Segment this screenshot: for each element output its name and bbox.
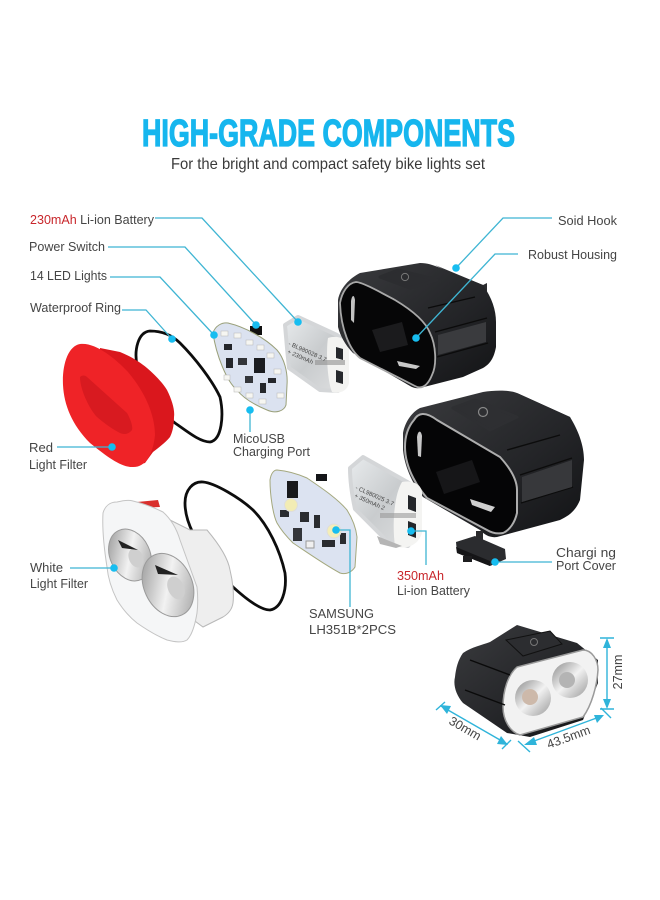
dimension: 27mm bbox=[600, 638, 625, 709]
callout: Red Light Filter: Light Filter bbox=[29, 458, 87, 472]
callout: SAMSUNG LH351B: SAMSUNG bbox=[309, 607, 374, 621]
callout: Red Light Filter bbox=[29, 441, 116, 472]
robust housing, white set bbox=[403, 391, 584, 537]
callout: Robust Housing bbox=[412, 248, 617, 342]
robust housing, red set bbox=[338, 263, 496, 388]
callout: White Light Filter: Light Filter bbox=[30, 577, 88, 591]
callout: 350mAh Li-ion Battery: Li-ion Battery bbox=[397, 584, 471, 598]
callout: Waterproof Ring bbox=[30, 301, 176, 343]
battery, 230mAh bbox=[285, 317, 349, 393]
callout: 350mAh Li-ion Battery: 350mAh bbox=[397, 569, 444, 583]
red light filter bbox=[63, 344, 174, 467]
waterproof ring, red set bbox=[136, 331, 222, 442]
callout: 230mAh Li-ion Battery bbox=[30, 213, 302, 326]
callout: 350mAh Li-ion Battery bbox=[397, 527, 471, 598]
callout: SAMSUNG LH351B bbox=[309, 526, 396, 637]
callout: 230mAh Li-ion Battery: 230mAh Li-ion Battery bbox=[30, 213, 155, 227]
battery, 350mAh: + 350mAh 2 bbox=[353, 493, 386, 512]
dimension: 43.5mm bbox=[518, 708, 611, 752]
callout: White Light Filter bbox=[30, 561, 118, 591]
callout: Power Switch bbox=[29, 240, 260, 329]
battery, 350mAh: - CL980025 3.7 bbox=[354, 485, 395, 508]
circuit board, white set bbox=[270, 470, 357, 574]
callout: Charging Port Cover: Chargi ng bbox=[556, 546, 616, 560]
callout: Charging Port Cover bbox=[491, 546, 616, 573]
circuit board, red set bbox=[213, 323, 287, 412]
charging port cover bbox=[456, 531, 506, 566]
battery, 350mAh bbox=[350, 457, 422, 548]
dimension: 27mm: 27mm bbox=[611, 655, 625, 689]
callout: MicoUSB Charging Port: MicoUSB bbox=[233, 432, 285, 446]
small assembled light with dimensions bbox=[454, 625, 598, 737]
title: HIGH-GRADE COMPONENTS bbox=[142, 113, 515, 155]
dimension: 30mm: 30mm bbox=[446, 714, 484, 743]
waterproof ring, white set bbox=[185, 482, 285, 610]
callout: Soid Hook bbox=[452, 214, 618, 272]
dimension: 30mm bbox=[436, 702, 511, 749]
white light filter bbox=[100, 500, 233, 642]
dimension: 43.5mm: 43.5mm bbox=[545, 723, 592, 752]
battery, 230mAh: + 230mAh bbox=[286, 349, 314, 366]
callout: Soid Hook: Soid Hook bbox=[558, 214, 618, 228]
subtitle: For the bright and compact safety bike lights set bbox=[171, 156, 486, 173]
callout: Waterproof Ring: Waterproof Ring bbox=[30, 301, 121, 315]
battery, 230mAh: - BL980028 3.7 bbox=[287, 341, 328, 364]
callout: White Light Filter: White bbox=[30, 561, 63, 575]
callout: Robust Housing: Robust Housing bbox=[528, 248, 617, 262]
callout: SAMSUNG LH351B: LH351B*2PCS bbox=[309, 623, 396, 637]
callout: 14 LED Lights bbox=[30, 269, 218, 339]
callout: Power Switch: Power Switch bbox=[29, 240, 105, 254]
callout: MicoUSB Charging Port bbox=[233, 406, 311, 459]
callout: Charging Port Cover: Port Cover bbox=[556, 559, 616, 573]
callout: Red Light Filter: Red bbox=[29, 441, 53, 455]
callout: MicoUSB Charging Port: Charging Port bbox=[233, 445, 311, 459]
callout: 14 LED Lights: 14 LED Lights bbox=[30, 269, 107, 283]
